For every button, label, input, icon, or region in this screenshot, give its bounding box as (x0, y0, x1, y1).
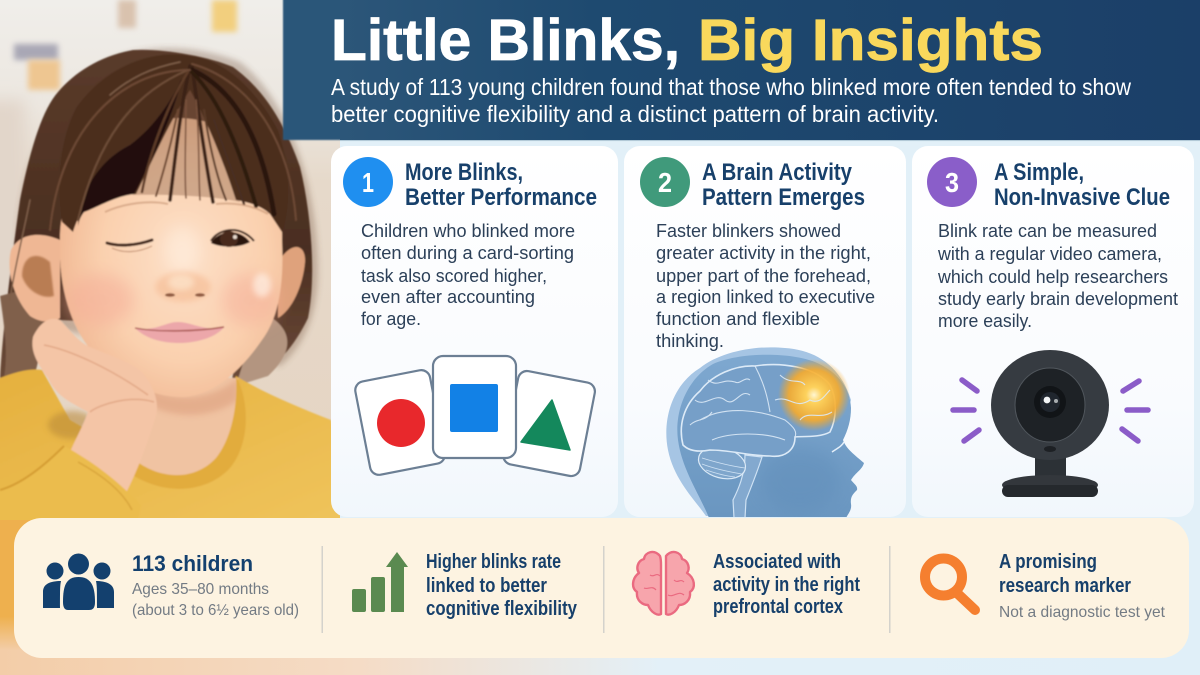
winking eye (107, 240, 152, 252)
heading 2 (702, 159, 865, 211)
webcam base (1002, 455, 1098, 497)
stat text (713, 551, 860, 618)
heading 3: Non-Invasive Clue (994, 184, 1170, 211)
body text 1: for age. (361, 309, 421, 329)
sulci (690, 366, 832, 440)
stat text: Not a diagnostic test yet (999, 604, 1166, 621)
heading 1: More Blinks, (405, 159, 523, 186)
number badge 2 (640, 157, 690, 207)
stat text (426, 551, 578, 620)
head silhouette (677, 355, 864, 518)
panel: more blinks, better performance (331, 146, 618, 517)
panel: a simple, non-invasive clue (912, 146, 1194, 517)
neck (139, 376, 239, 476)
icon: rising bars with arrow (352, 552, 408, 612)
hair wisps halo (18, 48, 318, 366)
sleeve (70, 450, 128, 496)
photo: smiling child winking (0, 0, 350, 525)
stat text: Ages 35–80 months (132, 581, 269, 598)
body text 3: with a regular video camera, (937, 244, 1162, 264)
left card with red circle (354, 369, 446, 476)
stat text: activity in the right (713, 574, 860, 596)
icon: pink brain (633, 552, 694, 615)
body text 2: a region linked to executive (656, 287, 875, 307)
stat text: Associated with (713, 551, 841, 573)
icon: group of people (43, 554, 114, 610)
heading 3: A Simple, (994, 159, 1084, 186)
right ear (278, 247, 305, 318)
body text 3: more easily. (938, 311, 1032, 331)
body text 1: Children who blinked more (361, 221, 575, 241)
smile (135, 322, 224, 343)
number badge 3: 3 (945, 167, 959, 198)
body text 2: thinking. (656, 331, 724, 351)
heading 1: Better Performance (405, 184, 597, 211)
lens (1015, 368, 1085, 442)
title: Little Blinks, (331, 8, 680, 73)
forehead hair veil (133, 85, 240, 202)
cheeks (66, 274, 134, 326)
body text 2: upper part of the forehead, (656, 266, 871, 286)
glow (778, 359, 850, 431)
stat text: 113 children (132, 551, 253, 576)
number badge 3 (927, 157, 977, 207)
eye hint (832, 442, 844, 452)
stat: 113 children (43, 551, 299, 619)
title: Big Insights (698, 8, 1043, 73)
purple rays (953, 380, 1148, 441)
shirt (0, 369, 350, 525)
open eye (211, 230, 254, 247)
stat text: cognitive flexibility (426, 598, 578, 620)
neck shadow (155, 381, 237, 416)
body text 3: Blink rate can be measured (938, 221, 1157, 241)
face shading (786, 459, 815, 468)
collar (128, 376, 246, 489)
nose (155, 272, 211, 302)
illustration: child head with glowing brain (666, 347, 864, 518)
panel: a brain activity pattern emerges (624, 146, 906, 518)
bang strands (10, 62, 296, 300)
yellow edge left of banner (0, 515, 40, 650)
middle card with blue square (433, 356, 516, 458)
subtitle: better cognitive flexibility and a distinct pattern of brain activity. (331, 101, 939, 127)
body text 1: task also scored higher, (361, 266, 547, 286)
body text 3: which could help researchers (937, 267, 1168, 287)
icon: shape cards (354, 356, 596, 478)
icon: magnifying glass (925, 558, 975, 610)
body text 1 (361, 221, 575, 329)
stat text: prefrontal cortex (713, 596, 843, 618)
body text 2: Faster blinkers showed (656, 221, 841, 241)
back hair (0, 50, 312, 381)
heading 3 (994, 159, 1170, 211)
left ear (10, 235, 60, 322)
photo backdrop (0, 0, 340, 426)
stat text: research marker (999, 575, 1131, 597)
stat: higher blink rate (352, 551, 578, 620)
stat text: Higher blinks rate (426, 551, 561, 573)
number badge 1 (343, 157, 393, 207)
stat text: A promising (999, 551, 1097, 573)
hair halo (666, 347, 851, 516)
body text 2: greater activity in the right, (656, 243, 871, 263)
lower right hair (236, 318, 287, 386)
heading 2: A Brain Activity (702, 159, 853, 186)
webcam body (991, 350, 1109, 460)
header band (283, 0, 1200, 140)
finger shadow (44, 345, 154, 412)
arm and hand (32, 319, 157, 495)
bangs (59, 54, 288, 232)
bottom stats banner (14, 518, 1189, 658)
background wash below banner (0, 600, 1200, 675)
icon: webcam (953, 350, 1148, 497)
body text 2: function and flexible (656, 309, 820, 329)
shadow under hand (48, 411, 96, 439)
subtitle (331, 74, 1131, 127)
right card with green triangle (502, 369, 596, 478)
body text 3: study early brain development (938, 289, 1178, 309)
heading 2: Pattern Emerges (702, 184, 865, 211)
body text 1: often during a card-sorting (361, 243, 574, 263)
body text 3 (937, 221, 1178, 331)
face (60, 118, 282, 397)
stat text: linked to better (426, 575, 547, 597)
brain stem (733, 455, 762, 518)
title (331, 8, 1043, 73)
body text 2 (656, 221, 875, 351)
brain outline (681, 365, 835, 456)
lower left hair (0, 292, 44, 376)
child (0, 48, 350, 525)
eyebrow shadow (105, 202, 268, 214)
number badge 1: 1 (362, 167, 374, 198)
heading 1 (405, 159, 597, 211)
number badge 2: 2 (658, 167, 672, 198)
dark bang (78, 78, 182, 226)
stat: research marker (925, 551, 1166, 621)
stat text (999, 551, 1166, 621)
cerebellum (698, 451, 746, 480)
body text 1: even after accounting (361, 287, 535, 307)
stat text: (about 3 to 6½ years old) (132, 602, 299, 619)
subtitle: A study of 113 young children found that those who blinked more often tended to show (331, 74, 1131, 100)
stat: right prefrontal cortex (633, 551, 860, 618)
stat text (132, 551, 299, 619)
